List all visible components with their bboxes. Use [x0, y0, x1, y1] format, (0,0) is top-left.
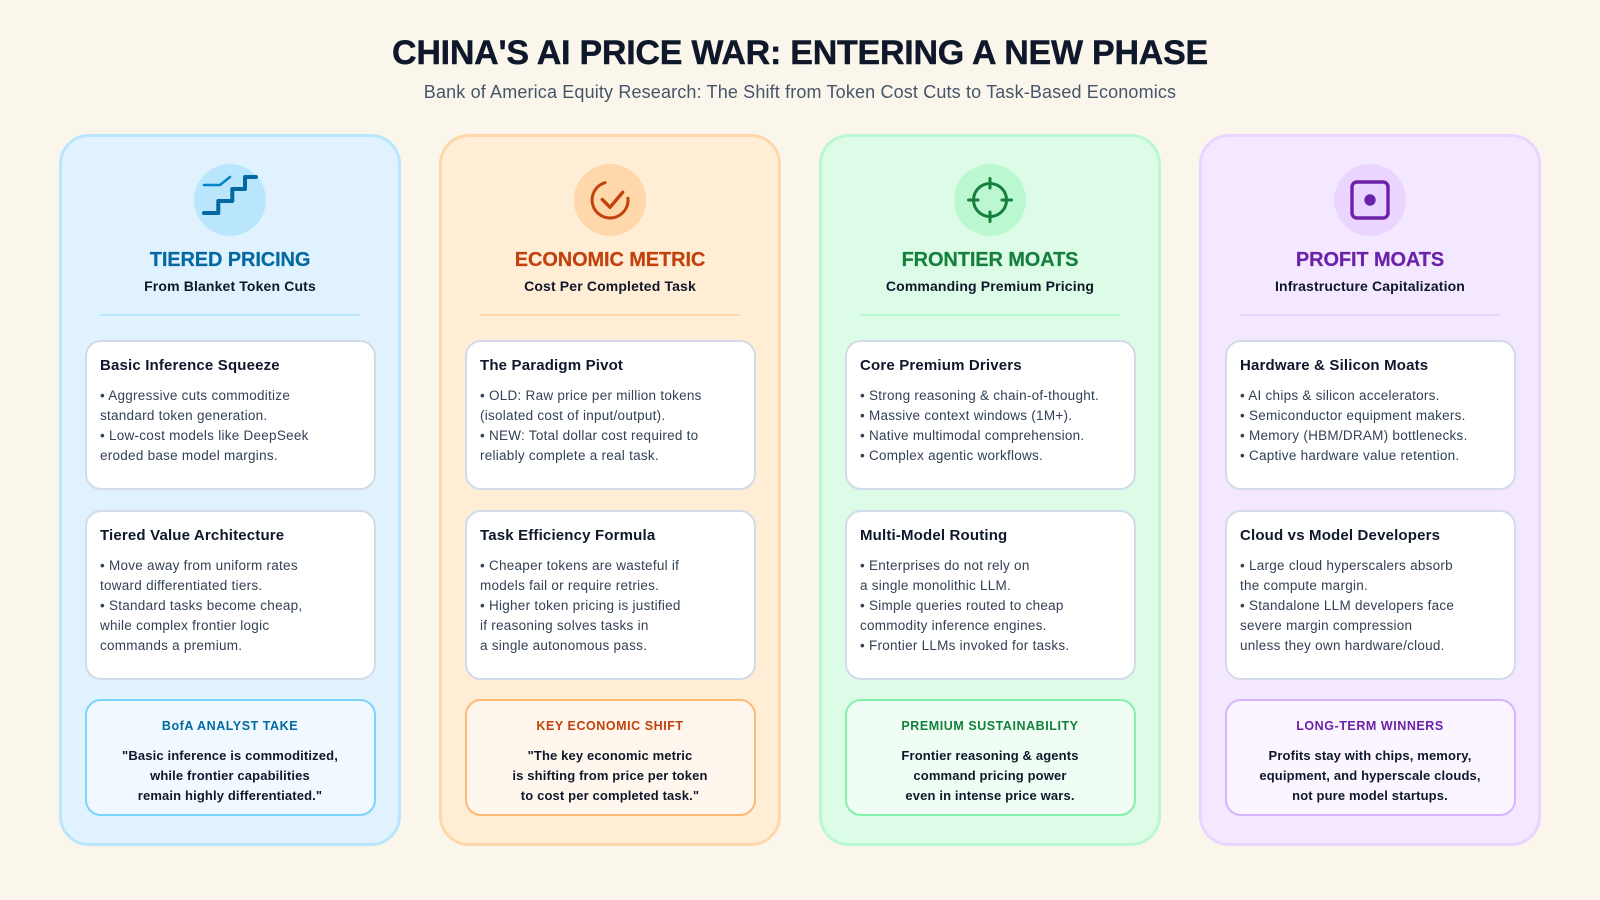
card title: Cloud vs Model Developers	[1240, 527, 1440, 544]
icon: chip	[1334, 164, 1406, 236]
card text: (isolated cost of input/output).	[480, 408, 665, 423]
callout text: command pricing power	[913, 768, 1067, 782]
card title: Hardware & Silicon Moats	[1240, 357, 1428, 374]
card text: unless they own hardware/cloud.	[1240, 638, 1445, 653]
card: multi-model routing	[844, 510, 1136, 680]
card: cloud vs model developers	[1224, 510, 1516, 680]
icon: stairs	[194, 164, 266, 236]
panel: tiered pricing	[59, 134, 401, 846]
callout text: Profits stay with chips, memory,	[1269, 748, 1471, 762]
card text: models fail or require retries.	[480, 578, 659, 593]
card text	[480, 558, 681, 653]
card: paradigm pivot	[464, 340, 756, 490]
card title: Multi-Model Routing	[860, 527, 1007, 544]
card: hardware and silicon moats	[1224, 340, 1516, 490]
panel: economic metric	[439, 134, 781, 846]
card title: Task Efficiency Formula	[480, 527, 655, 544]
callout text	[122, 748, 338, 802]
card text: toward differentiated tiers.	[100, 578, 262, 593]
card text: reliably complete a real task.	[480, 448, 659, 463]
card text: • Frontier LLMs invoked for tasks.	[860, 638, 1069, 653]
callout title: BofA ANALYST TAKE	[162, 719, 298, 733]
card title: The Paradigm Pivot	[480, 357, 623, 374]
card text: • Captive hardware value retention.	[1240, 448, 1459, 463]
callout text: "Basic inference is commoditized,	[122, 748, 338, 762]
callout text	[1259, 748, 1481, 802]
callout: premium sustainability	[844, 699, 1136, 816]
callout title: KEY ECONOMIC SHIFT	[536, 719, 684, 733]
callout text	[512, 748, 708, 802]
card text: • Semiconductor equipment makers.	[1240, 408, 1466, 423]
callout title: LONG-TERM WINNERS	[1296, 719, 1444, 733]
card text: eroded base model margins.	[100, 448, 278, 463]
heading: PROFIT MOATS	[1296, 249, 1444, 271]
card text: • Low-cost models like DeepSeek	[100, 428, 309, 443]
subheading: Commanding Premium Pricing	[886, 278, 1094, 294]
card text: • Higher token pricing is justified	[480, 598, 681, 613]
card text	[1240, 558, 1454, 653]
callout text: "The key economic metric	[528, 748, 692, 762]
card text: commands a premium.	[100, 638, 242, 653]
card text: • Memory (HBM/DRAM) bottlenecks.	[1240, 428, 1468, 443]
subheading: Infrastructure Capitalization	[1275, 278, 1465, 294]
card: task efficiency formula	[464, 510, 756, 680]
card text: • Cheaper tokens are wasteful if	[480, 558, 679, 573]
callout: long-term winners	[1224, 699, 1516, 816]
title: CHINA'S AI PRICE WAR: ENTERING A NEW PHASE	[392, 34, 1208, 72]
heading: TIERED PRICING	[150, 249, 310, 271]
callout text: to cost per completed task."	[521, 788, 699, 802]
heading: FRONTIER MOATS	[902, 249, 1078, 271]
panel: frontier moats	[819, 134, 1161, 846]
card: core premium drivers	[844, 340, 1136, 490]
icon: check circle	[574, 164, 646, 236]
card text	[100, 388, 309, 463]
card text: • Strong reasoning & chain-of-thought.	[860, 388, 1099, 403]
card: basic inference squeeze	[84, 340, 376, 490]
card text: • AI chips & silicon accelerators.	[1240, 388, 1440, 403]
card text	[1240, 388, 1468, 463]
card text	[480, 388, 702, 463]
card title: Tiered Value Architecture	[100, 527, 284, 544]
card text: • OLD: Raw price per million tokens	[480, 388, 702, 403]
card text: while complex frontier logic	[100, 618, 269, 633]
callout text: while frontier capabilities	[150, 768, 310, 782]
card: tiered value architecture	[84, 510, 376, 680]
icon: crosshair	[954, 164, 1026, 236]
card text: • Large cloud hyperscalers absorb	[1240, 558, 1453, 573]
subheading: Cost Per Completed Task	[524, 278, 696, 294]
callout: analyst take	[84, 699, 376, 816]
callout text	[901, 748, 1079, 802]
card text: • NEW: Total dollar cost required to	[480, 428, 698, 443]
card text: • Simple queries routed to cheap	[860, 598, 1064, 613]
card text: standard token generation.	[100, 408, 267, 423]
card text	[860, 388, 1099, 463]
card text: commodity inference engines.	[860, 618, 1047, 633]
card title: Core Premium Drivers	[860, 357, 1022, 374]
subheading: From Blanket Token Cuts	[144, 278, 316, 294]
callout text: equipment, and hyperscale clouds,	[1259, 768, 1481, 782]
callout text: even in intense price wars.	[905, 788, 1075, 802]
card text: • Enterprises do not rely on	[860, 558, 1030, 573]
card text	[100, 558, 302, 653]
card text	[860, 558, 1069, 653]
panel: profit moats	[1199, 134, 1541, 846]
card text: • Aggressive cuts commoditize	[100, 388, 290, 403]
card text: • Native multimodal comprehension.	[860, 428, 1084, 443]
subtitle: Bank of America Equity Research: The Shift from Token Cost Cuts to Task-Based Economics	[424, 82, 1176, 102]
callout text: is shifting from price per token	[512, 768, 708, 782]
heading: ECONOMIC METRIC	[515, 249, 705, 271]
card title: Basic Inference Squeeze	[100, 357, 280, 374]
card text: • Complex agentic workflows.	[860, 448, 1043, 463]
callout text: Frontier reasoning & agents	[901, 748, 1079, 762]
card text: a single autonomous pass.	[480, 638, 647, 653]
card text: • Move away from uniform rates	[100, 558, 298, 573]
card text: • Standard tasks become cheap,	[100, 598, 302, 613]
card text: • Massive context windows (1M+).	[860, 408, 1072, 423]
callout title: PREMIUM SUSTAINABILITY	[901, 719, 1079, 733]
callout text: remain highly differentiated."	[138, 788, 322, 802]
callout text: not pure model startups.	[1292, 788, 1448, 802]
card text: a single monolithic LLM.	[860, 578, 1011, 593]
card text: if reasoning solves tasks in	[480, 618, 649, 633]
callout: key economic shift	[464, 699, 756, 816]
card text: the compute margin.	[1240, 578, 1368, 593]
card text: • Standalone LLM developers face	[1240, 598, 1454, 613]
card text: severe margin compression	[1240, 618, 1412, 633]
